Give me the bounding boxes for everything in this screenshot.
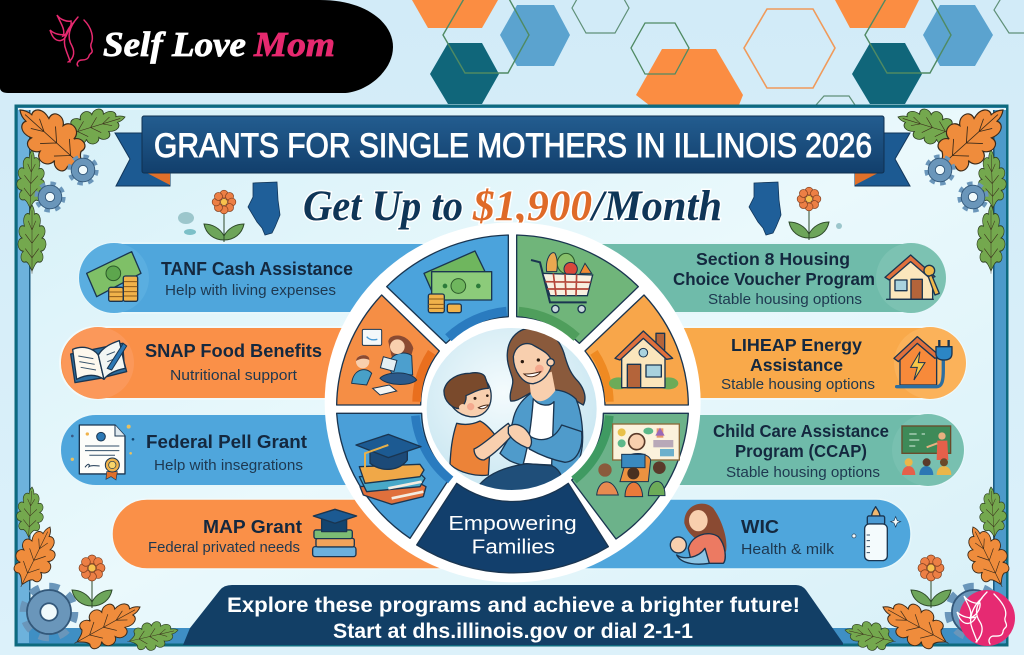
icon: Illinois right [749,182,781,235]
panel: LIHEAP [546,327,966,399]
wheel segment: parent reading [337,295,439,405]
panel: TANF [79,243,499,313]
mother legs [479,463,562,490]
label: SNAP Food Benefits [145,341,322,361]
subtitle: Get Up to [303,183,463,230]
label: MAP Grant [203,516,302,537]
icon: house with plug [894,337,952,387]
text: Empowering: Empowering [448,512,577,535]
title ribbon [115,116,910,186]
subtitle: $1,900 [472,183,592,230]
CTA line 1: Explore these programs and achieve a brighter future! [227,594,800,617]
infographic frame [16,106,1007,645]
logo wordmark: Self Love [103,25,246,64]
label: TANF Cash Assistance [161,259,353,279]
description: Help with living expenses [165,283,336,299]
icon: cap and books [313,509,357,557]
panel: Federal Pell Grant [60,414,480,486]
icon: certificate [71,425,134,480]
label: Federal Pell Grant [146,432,307,452]
call-to-action banner [183,585,843,645]
central wheel [325,222,701,582]
corner foliage top left [4,92,130,274]
icon: cash and coins [87,252,141,301]
label line 2: Choice Voucher Program [673,269,875,289]
decorative blobs [178,212,842,235]
icon: house and key [885,255,939,299]
hands [508,425,531,448]
wheel segment: education [337,413,451,538]
wheel segment: home [585,295,688,405]
description: Health & milk [741,542,835,558]
icon: Illinois left [248,182,280,235]
illustration: mother and child [427,328,597,495]
child arm [474,423,514,460]
text: Families: Families [472,535,555,558]
corner foliage bottom left [4,486,181,655]
logo banner [0,0,393,93]
description: Nutritional support [170,368,297,384]
icon: baby bottle [852,507,901,561]
icon: mother feeding baby [670,504,726,564]
mother sleeve [529,425,582,462]
mother shirt [523,398,554,465]
mother hair [507,328,585,405]
icon: open book and pen [71,341,127,383]
mother face [513,344,552,384]
label: Child Care Assistance [713,421,889,441]
icon: logo woman and leaves [50,15,92,66]
icon: classroom [902,426,951,475]
description: Help with insegrations [154,458,303,474]
label line 2: Assistance [750,355,843,375]
panel: WIC [551,499,911,569]
center disc [424,322,601,493]
panel: Section 8 [526,243,946,313]
panel: SNAP [60,327,480,399]
corner foliage top right [893,92,1019,274]
description: Stable housing options [726,465,880,481]
label: WIC [741,516,779,537]
subtitle: /Month [589,183,722,230]
description: Stable housing options [708,292,862,308]
corner foliage bottom right [842,486,1019,655]
label line 2: Program (CCAP) [735,441,867,461]
logo banner: Mom [253,25,335,64]
subtitle [303,183,722,230]
label: LIHEAP Energy [731,335,862,355]
description: Stable housing options [721,377,875,393]
panel: MAP Grant [112,499,472,569]
wheel segment: groceries [517,235,638,343]
icon: flower left [204,190,244,242]
mother cardigan [500,390,583,477]
label: Section 8 Housing [696,249,850,269]
icon: flower right [789,187,829,240]
panel: CCAP [544,414,964,486]
description: Federal privated needs [148,540,300,556]
wheel segment: child care [572,413,688,539]
badge: pink logo [957,590,1015,646]
wheel segment: Empowering Families [417,483,608,573]
title text: GRANTS FOR SINGLE MOTHERS IN ILLINOIS 2026 [154,127,872,165]
mother neck [529,372,555,401]
CTA line 2: Start at dhs.illinois.gov or dial 2-1-1 [333,620,693,643]
hexagon pattern header [412,0,1024,105]
child head [452,382,492,418]
wheel segment: cash [387,235,508,343]
child shirt [450,421,495,475]
